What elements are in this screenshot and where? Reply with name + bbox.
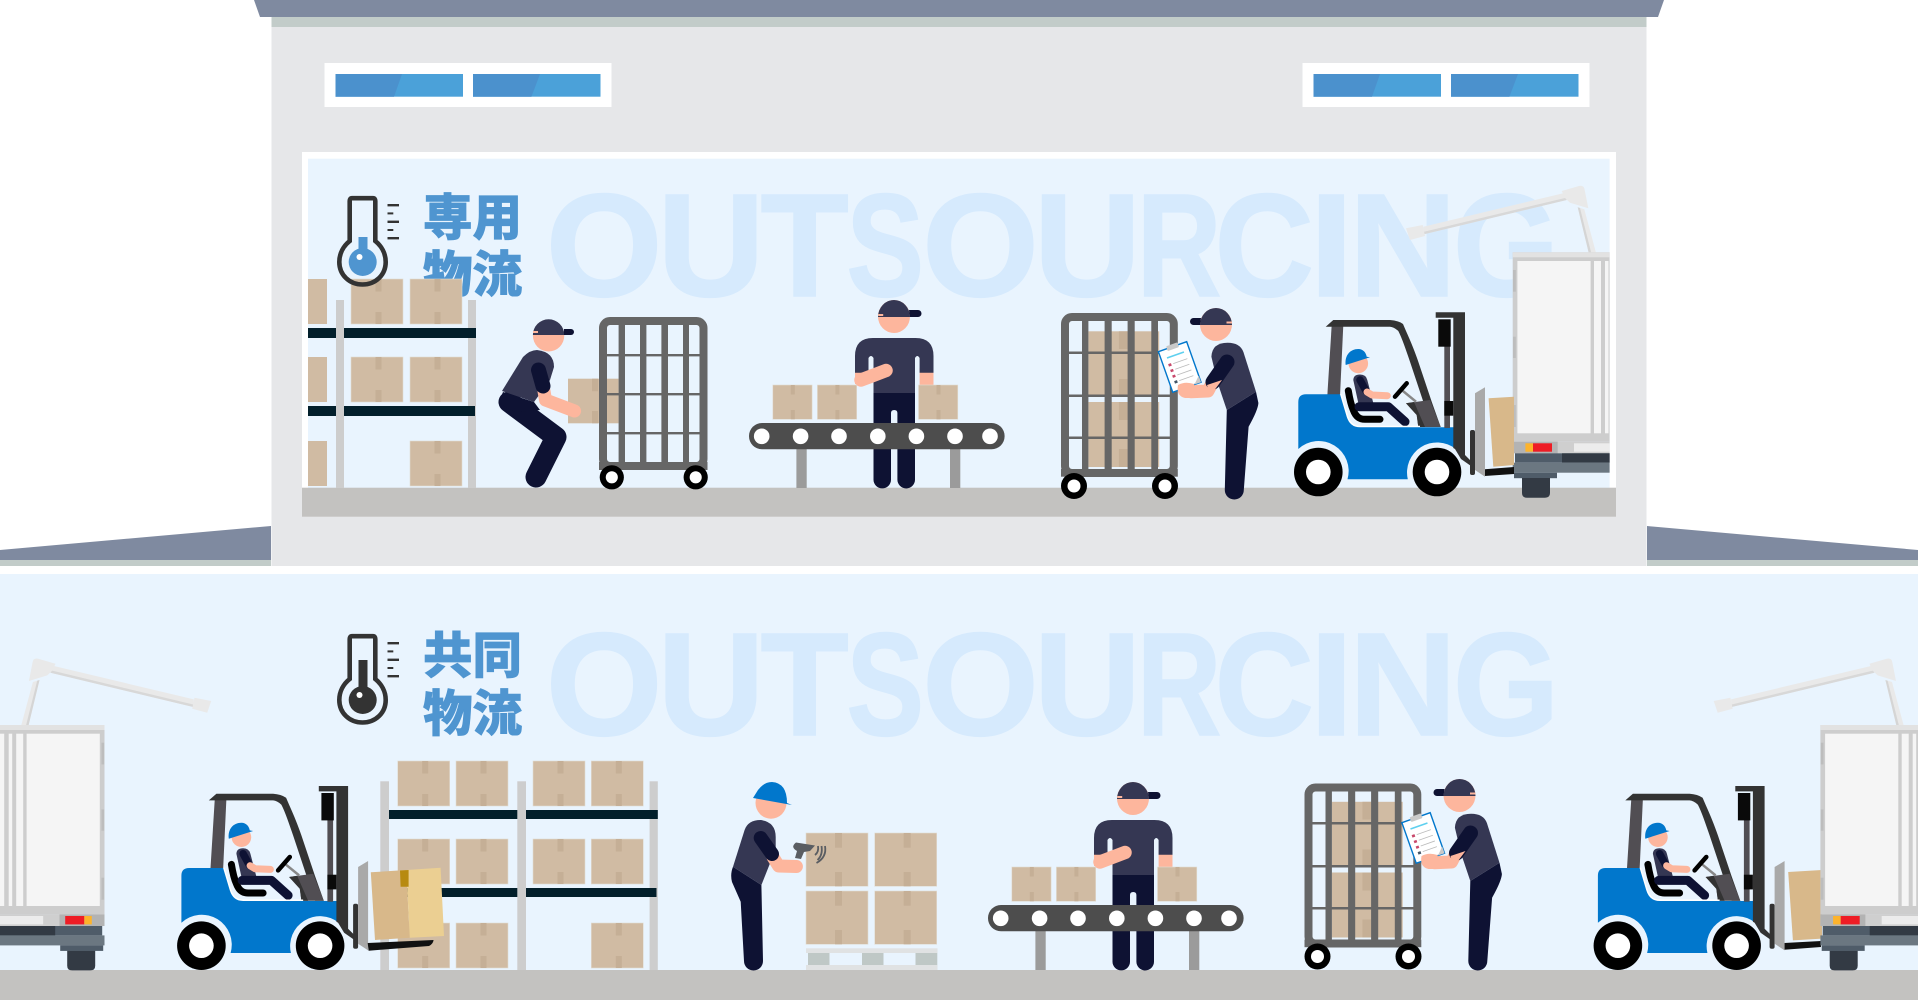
floor [302,488,1616,517]
truck: right [1714,658,1918,970]
watermark: OUTSOURCING: I [1309,164,1354,327]
forklift [1294,312,1485,496]
right side roof [1647,526,1918,566]
forklift: left, carrying a box [177,786,368,970]
forklift: right [1594,786,1785,970]
watermark: OUTSOURCING: U [658,603,764,766]
panel: shared logistics interior [0,574,1918,1000]
truck: left [0,658,211,970]
icon: thermometer, room temperature [339,636,399,722]
roof gutter [272,17,1646,27]
heading: shared logistics: 共同 [423,629,522,684]
heading: dedicated logistics [423,191,522,303]
shelving with boxes [308,279,476,488]
roll cage: empty [599,319,708,489]
floor [0,970,1918,1000]
icon: thermometer, cold blue [339,198,399,284]
shelving with boxes [380,761,658,970]
panel: dedicated logistics interior [302,152,1616,517]
delivery truck with dock arm [1406,186,1625,498]
watermark: OUTSOURCING: S [847,603,924,766]
watermark: OUTSOURCING: S [847,164,924,327]
watermark: OUTSOURCING: N [1349,603,1457,766]
watermark: OUTSOURCING: R [1137,603,1221,766]
watermark: OUTSOURCING: C [1215,603,1314,766]
main roof [254,0,1664,17]
pallet of boxes [806,833,938,970]
watermark: OUTSOURCING: I [1309,603,1354,766]
roll cage: loaded [1304,786,1422,970]
parcel on fork [368,868,444,951]
watermark: OUTSOURCING: G [1453,164,1559,327]
watermark: OUTSOURCING: U [658,164,764,327]
fork tines [1784,941,1821,950]
watermark: OUTSOURCING: T [761,164,849,327]
worker lifting a box [498,319,619,477]
heading: dedicated logistics: 専用 [423,191,522,246]
watermark: OUTSOURCING: U [1034,603,1141,766]
watermark: OUTSOURCING: O [546,603,662,766]
worker checking clipboard [1401,779,1502,970]
parcel on fork, in truck [1489,397,1514,467]
heading: shared logistics: 物流 [423,687,522,742]
worker scanning a pallet [731,782,938,970]
heading: dedicated logistics: 物流 [423,248,522,303]
roll cage: loaded [1061,315,1178,499]
left side roof [0,526,271,566]
watermark: OUTSOURCING: O [922,164,1039,327]
watermark: OUTSOURCING: T [761,603,849,766]
window: left [324,63,612,107]
window: right [1302,63,1590,107]
watermark: OUTSOURCING: G [1453,603,1559,766]
watermark: OUTSOURCING: O [546,164,662,327]
worker checking clipboard [1158,308,1258,500]
heading: shared logistics [423,629,522,742]
parcel on fork, in truck [1788,870,1822,940]
watermark: OUTSOURCING: O [922,603,1039,766]
building wall [272,17,1646,566]
watermark: OUTSOURCING: U [1034,164,1141,327]
fork tines [1485,467,1514,476]
watermark: OUTSOURCING: N [1349,164,1457,327]
conveyor with worker and boxes [749,300,1005,488]
watermark: OUTSOURCING: C [1215,164,1314,327]
watermark: OUTSOURCING: R [1137,164,1221,327]
conveyor with worker and boxes [988,782,1244,970]
